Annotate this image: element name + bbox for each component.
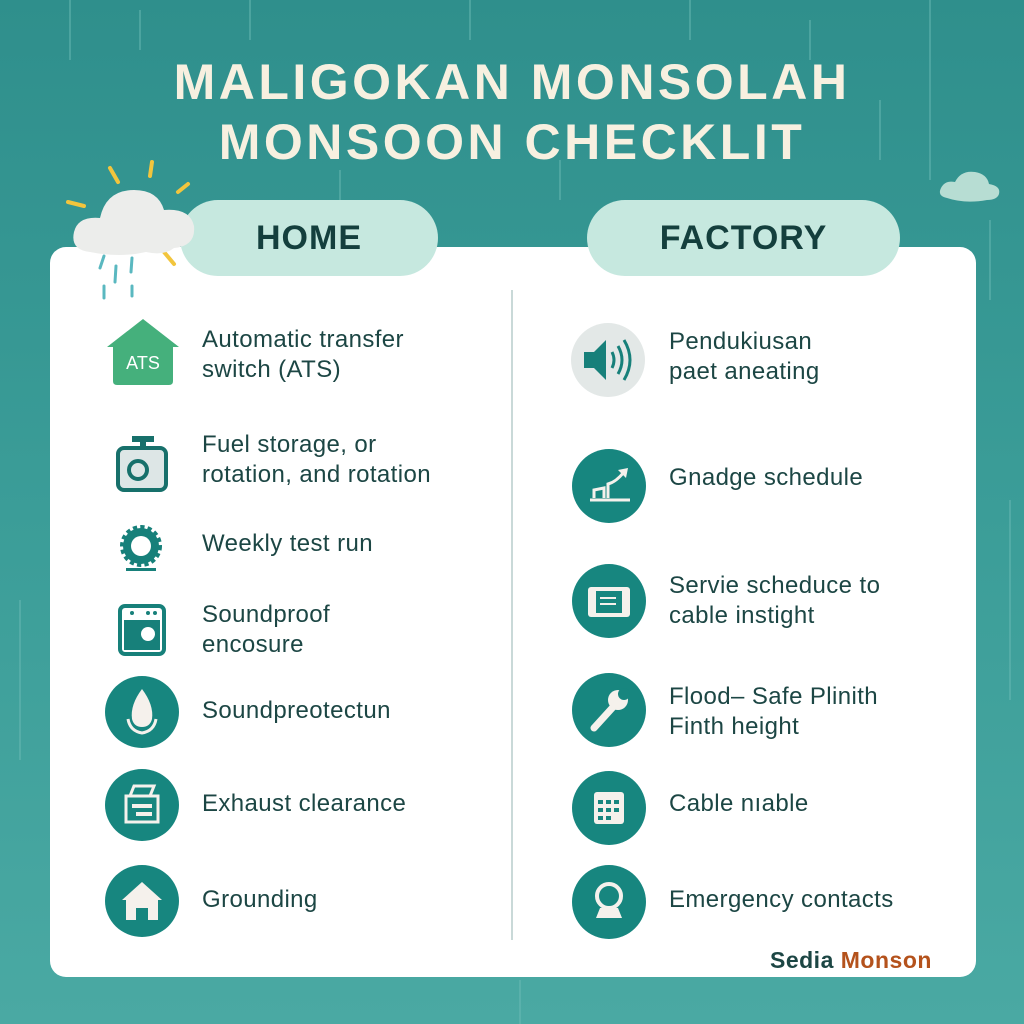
text	[202, 601, 330, 658]
item: gnadge schedule	[572, 449, 863, 523]
icon: circle printer	[105, 769, 179, 841]
title	[174, 54, 850, 170]
heading: HOME	[180, 200, 438, 276]
item: weekly test run	[120, 525, 373, 571]
text: paet aneating	[669, 358, 820, 385]
icon: gear	[120, 525, 162, 571]
text: Cable nıable	[669, 790, 809, 817]
icon: panel	[572, 564, 646, 638]
text	[669, 683, 878, 740]
icon: ATS house	[107, 319, 179, 385]
item: cable niable	[572, 771, 809, 845]
item: emergency contacts	[572, 865, 894, 939]
divider	[511, 290, 513, 940]
text: Fuel storage, or	[202, 431, 376, 458]
text: encosure	[202, 631, 304, 658]
text: Soundproof	[202, 601, 330, 628]
item: soundpreotectun	[105, 676, 391, 748]
text	[669, 572, 880, 629]
footer brand: Sedia Monson	[770, 947, 932, 973]
item: servie schedule	[572, 564, 880, 638]
icon: circle house	[105, 865, 179, 937]
icon: ATS house: ATS	[126, 353, 160, 373]
text: switch (ATS)	[202, 356, 341, 383]
text: Exhaust clearance	[202, 790, 406, 817]
heading: FACTORY	[587, 200, 900, 276]
item: ATS	[107, 319, 404, 385]
text	[669, 328, 820, 385]
panel: card	[50, 247, 976, 977]
text	[202, 431, 431, 488]
icon: cloud with sun and rain	[66, 160, 194, 300]
item: flood-safe plinth	[572, 673, 878, 747]
text: Flood– Safe Plinith	[669, 683, 878, 710]
item: pendukiusan	[571, 323, 820, 397]
text: Automatic transfer	[202, 326, 404, 353]
icon: contact	[572, 865, 646, 939]
item: exhaust clearance	[105, 769, 406, 841]
text: rotation, and rotation	[202, 461, 431, 488]
heading: FACTORY: FACTORY	[660, 219, 827, 257]
text: Grounding	[202, 886, 318, 913]
item: soundproof enclosure	[118, 601, 330, 658]
item: grounding	[105, 865, 318, 937]
icon: fuel can	[116, 436, 168, 492]
text: Soundpreotectun	[202, 697, 391, 724]
icon: circle drop	[105, 676, 179, 748]
icon: speaker	[571, 323, 645, 397]
text: Finth height	[669, 713, 799, 740]
icon: appliance	[118, 604, 166, 656]
title: MALIGOKAN MONSOLAH	[174, 54, 850, 110]
text: Gnadge schedule	[669, 464, 863, 491]
text: Emergency contacts	[669, 886, 894, 913]
text: Servie scheduce to	[669, 572, 880, 599]
icon: wrench	[572, 673, 646, 747]
text: Weekly test run	[202, 530, 373, 557]
item: fuel storage	[116, 431, 431, 492]
text: cable instight	[669, 602, 815, 629]
text: Pendukiusan	[669, 328, 812, 355]
heading: HOME: HOME	[256, 219, 362, 257]
icon: chart arrow	[572, 449, 646, 523]
text	[202, 326, 404, 383]
icon: calendar	[572, 771, 646, 845]
icon: small cloud top right	[940, 172, 1000, 202]
title: MONSOON CHECKLIT	[219, 114, 805, 170]
